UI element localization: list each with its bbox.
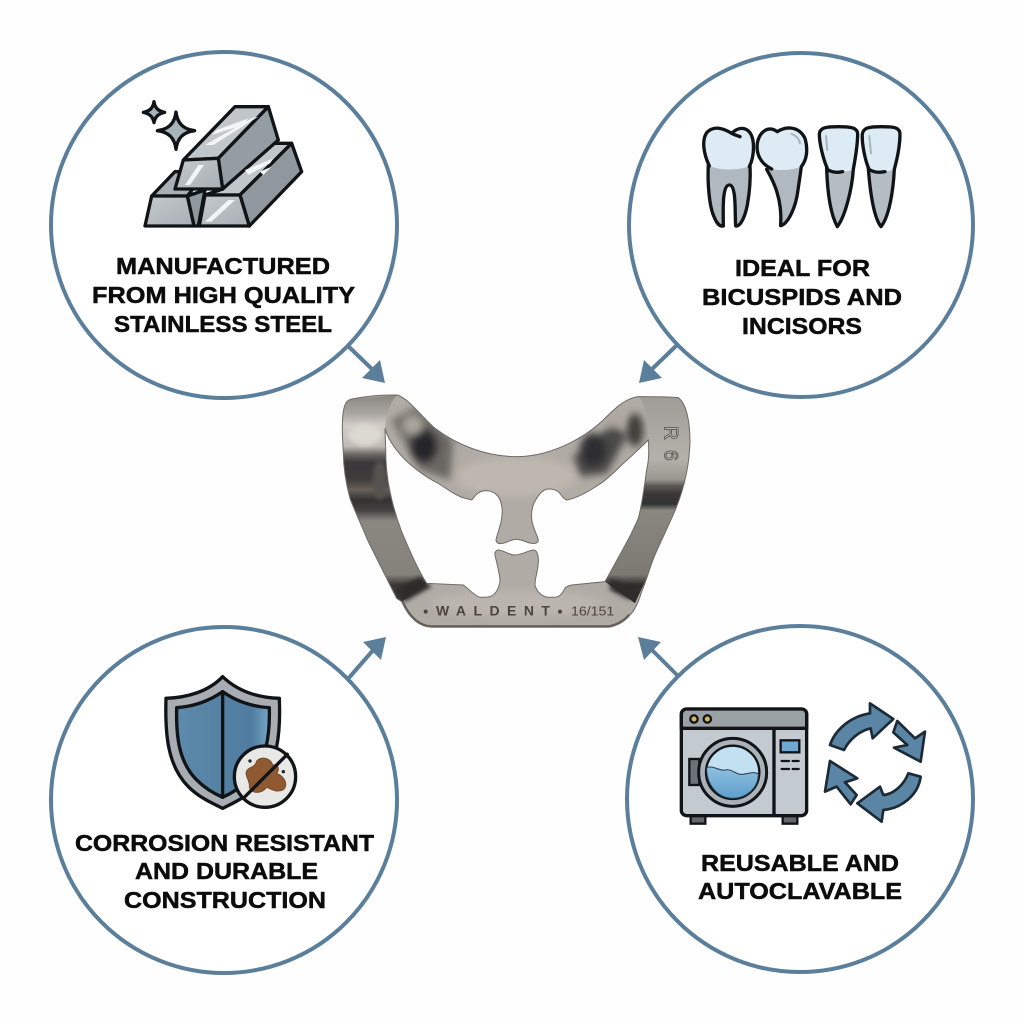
icon: shield with rust prohibition badge <box>166 677 296 808</box>
clamp engraving: R6 <box>659 426 680 461</box>
heading: bicuspids and incisors: BICUSPIDS AND <box>702 284 902 310</box>
heading: bicuspids and incisors <box>702 255 902 339</box>
arrow: bottom-right to clamp <box>638 637 677 675</box>
icon: recycling arrows <box>825 703 925 822</box>
panel: stainless steel <box>51 52 397 398</box>
clamp engraving: WALDENT 16/151: WALDENT <box>436 603 550 619</box>
heading: corrosion resistant: AND DURABLE <box>135 858 318 884</box>
clamp engraving: WALDENT 16/151 <box>424 603 614 619</box>
heading: bicuspids and incisors: IDEAL FOR <box>735 255 870 281</box>
heading: stainless steel: FROM HIGH QUALITY <box>92 282 355 308</box>
icon: autoclave machine <box>681 709 807 824</box>
arrow: bottom-left to clamp <box>347 637 386 680</box>
clamp engraving: WALDENT 16/151: 16/151 <box>571 604 614 619</box>
heading: stainless steel: STAINLESS STEEL <box>114 311 332 337</box>
panel: reusable and autoclavable <box>627 626 973 972</box>
icon: four teeth <box>704 127 900 227</box>
panel: bicuspids and incisors <box>629 53 973 397</box>
heading: corrosion resistant: CONSTRUCTION <box>124 887 326 913</box>
arrow: top-left to clamp <box>347 345 385 383</box>
heading: bicuspids and incisors: INCISORS <box>742 313 862 339</box>
arrow: top-right to clamp <box>639 345 677 383</box>
product photo: stainless dental clamp <box>333 390 697 633</box>
clamp engraving: R6: 6 <box>659 450 680 461</box>
heading: reusable and autoclavable <box>698 850 902 904</box>
icon: no rust badge <box>234 746 296 807</box>
clamp outline <box>342 395 690 627</box>
heading: corrosion resistant <box>75 830 375 913</box>
heading: corrosion resistant: CORROSION RESISTANT <box>75 830 375 856</box>
heading: reusable and autoclavable: REUSABLE AND <box>701 850 899 876</box>
heading: reusable and autoclavable: AUTOCLAVABLE <box>698 878 902 904</box>
heading: stainless steel <box>92 253 355 337</box>
heading: stainless steel: MANUFACTURED <box>116 253 330 279</box>
clamp engraving: R6: R <box>659 426 680 440</box>
icon: stacked steel ingots <box>143 102 302 226</box>
panel: corrosion resistant <box>51 627 397 973</box>
